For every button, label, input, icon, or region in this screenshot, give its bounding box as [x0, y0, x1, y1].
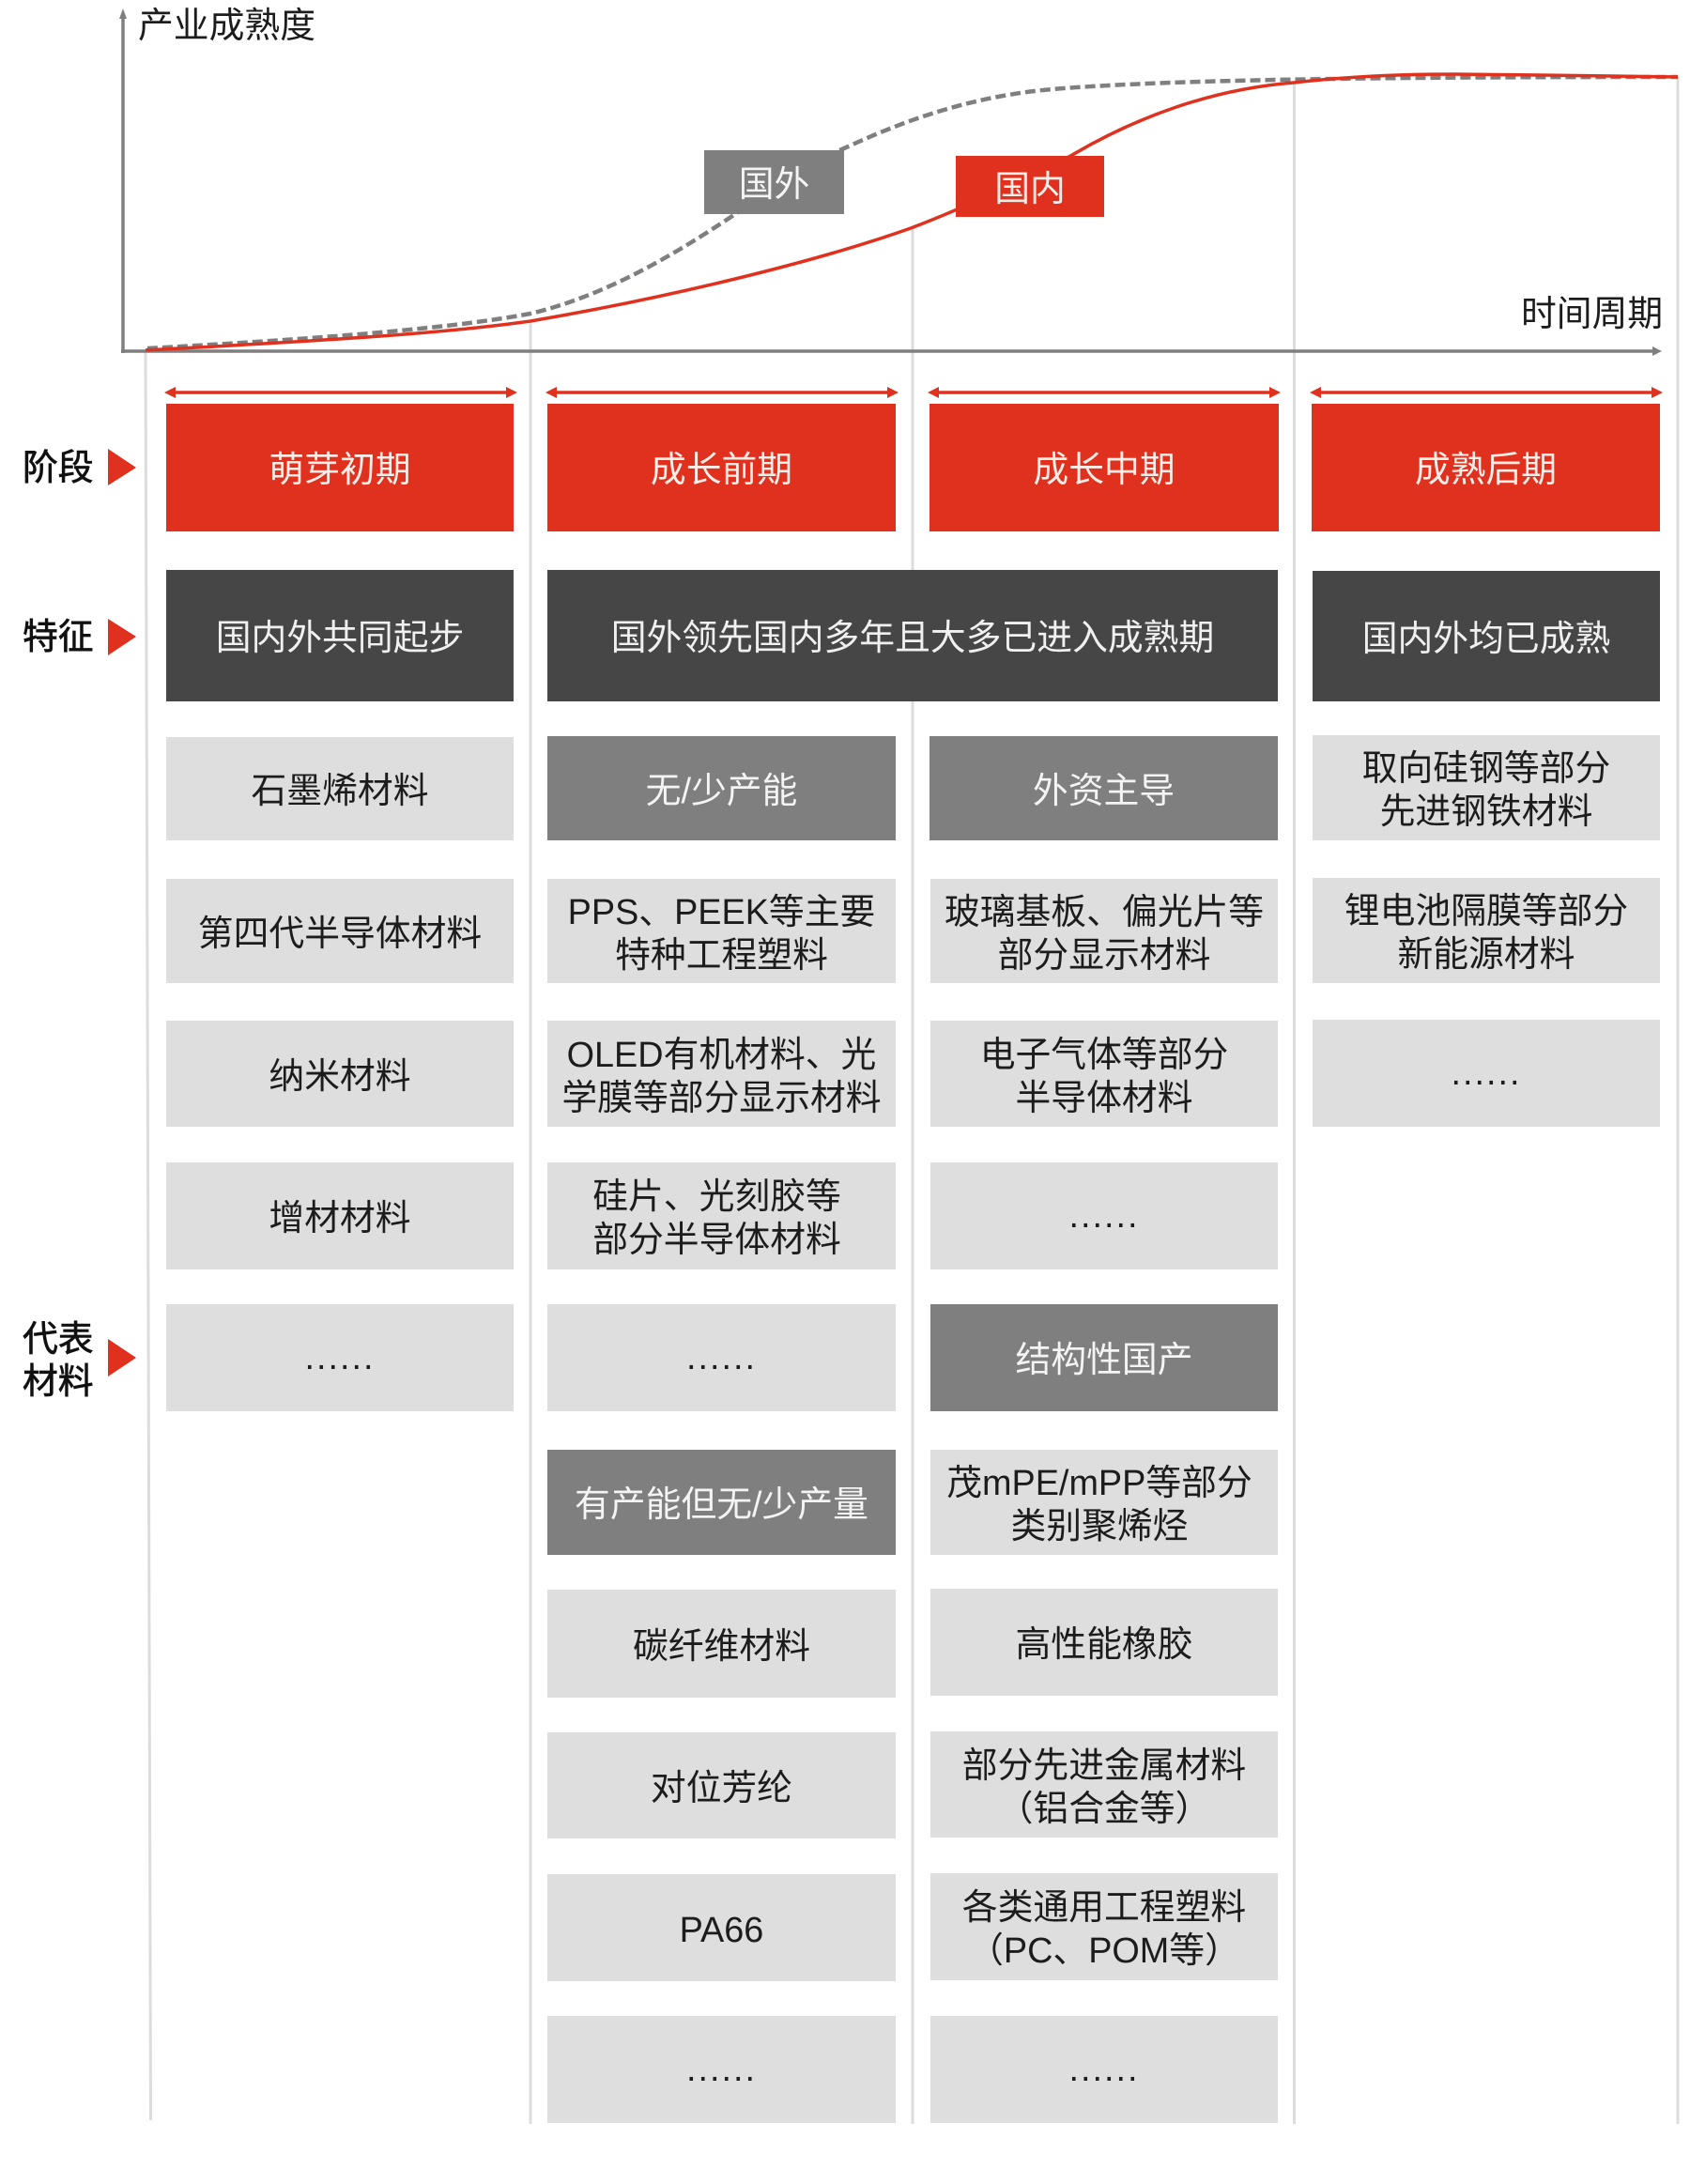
material: 硅片、光刻胶等 部分半导体材料	[592, 1177, 841, 1260]
stage: mid growth	[930, 404, 1279, 531]
column 4 materials: 取向硅钢等部分 先进钢铁材料	[1362, 749, 1610, 832]
material: 对位芳纶	[651, 1769, 792, 1808]
material: 电子气体等部分 半导体材料	[980, 1035, 1228, 1117]
material: ......	[304, 1338, 376, 1377]
column 3 header: foreign dominated: 外资主导	[1033, 772, 1175, 811]
material: ......	[686, 1338, 757, 1377]
material	[166, 1304, 514, 1411]
stage: early: 萌芽初期	[269, 451, 411, 490]
material	[547, 1874, 896, 1981]
material: OLED有机材料、光 学膜等部分显示材料	[561, 1035, 882, 1117]
characteristic: columns 2 and 3	[547, 570, 1278, 701]
legend tag: foreign: 国外	[739, 165, 809, 205]
characteristic: column 4: 国内外均已成熟	[1362, 620, 1610, 659]
material: 增材材料	[269, 1199, 411, 1238]
material	[166, 1162, 514, 1269]
row label: representative materials: 代表材料	[23, 1320, 94, 1402]
stage: early	[166, 404, 514, 531]
column 2 header: capacity without output	[547, 1450, 896, 1555]
stage: late maturity	[1312, 404, 1660, 531]
column 3 header: structural localization	[930, 1304, 1278, 1411]
stage: early growth: 成长前期	[651, 451, 792, 490]
stage: mid growth: 成长中期	[1033, 451, 1175, 490]
material	[166, 1021, 514, 1127]
material	[930, 2016, 1278, 2123]
material	[547, 2016, 896, 2123]
axes	[119, 8, 1662, 356]
curve: foreign	[147, 77, 1678, 348]
material: 各类通用工程塑料 （PC、POM等）	[962, 1888, 1246, 1971]
material	[547, 1732, 896, 1838]
column 2 header: no capacity	[547, 736, 896, 840]
legend tag: domestic: 国内	[994, 169, 1066, 208]
material	[1313, 1020, 1660, 1127]
material: PA66	[680, 1911, 763, 1950]
material	[930, 1731, 1278, 1838]
y axis title: 产业成熟度	[138, 7, 315, 46]
material	[930, 1021, 1278, 1127]
material: PPS、PEEK等主要 特种工程塑料	[568, 892, 875, 975]
material: ......	[1451, 1054, 1521, 1093]
material	[547, 1162, 896, 1269]
material: 纳米材料	[269, 1057, 411, 1097]
row label: characteristics: 特征	[23, 618, 94, 657]
characteristic: column 4	[1313, 571, 1660, 701]
x axis title: 时间周期	[1521, 295, 1663, 334]
row marker triangles	[108, 449, 136, 1377]
material: 碳纤维材料	[633, 1626, 810, 1666]
material: 锂电池隔膜等部分 新能源材料	[1344, 892, 1628, 975]
material	[1313, 878, 1660, 983]
stage: late maturity: 成熟后期	[1415, 451, 1557, 490]
material	[930, 1589, 1278, 1696]
material	[547, 1304, 896, 1411]
material	[930, 1873, 1278, 1980]
column 4 materials	[1313, 735, 1660, 840]
material: ......	[1068, 2050, 1140, 2089]
material	[166, 879, 514, 983]
column 3 header: structural localization: 结构性国产	[1016, 1341, 1192, 1380]
column 2 header: capacity without output: 有产能但无/少产量	[575, 1485, 868, 1525]
characteristic: column 1	[166, 570, 514, 701]
characteristic: columns 2 and 3: 国外领先国内多年且大多已进入成熟期	[611, 619, 1214, 658]
material: ......	[686, 2050, 757, 2089]
material: 第四代半导体材料	[198, 915, 482, 954]
material: ......	[1068, 1196, 1140, 1236]
material	[547, 1590, 896, 1698]
material: 茂mPE/mPP等部分 类别聚烯烃	[946, 1464, 1252, 1546]
material: 部分先进金属材料 （铝合金等）	[962, 1746, 1246, 1829]
material	[930, 1162, 1278, 1269]
material: 玻璃基板、偏光片等 部分显示材料	[945, 892, 1264, 975]
stage span arrows	[164, 387, 1663, 398]
column 2 header: no capacity: 无/少产能	[646, 772, 797, 811]
column 1 materials: 石墨烯材料	[252, 772, 428, 811]
characteristic: column 1: 国内外共同起步	[216, 619, 464, 658]
curve: domestic	[146, 74, 1678, 350]
material: 高性能橡胶	[1016, 1625, 1192, 1665]
material	[930, 1450, 1278, 1555]
stage: early growth	[547, 404, 896, 531]
row label: stage: 阶段	[23, 449, 94, 488]
legend tag: foreign	[704, 150, 844, 214]
column 1 materials	[166, 737, 514, 840]
legend tag: domestic	[956, 156, 1104, 217]
column 3 header: foreign dominated	[930, 736, 1278, 840]
